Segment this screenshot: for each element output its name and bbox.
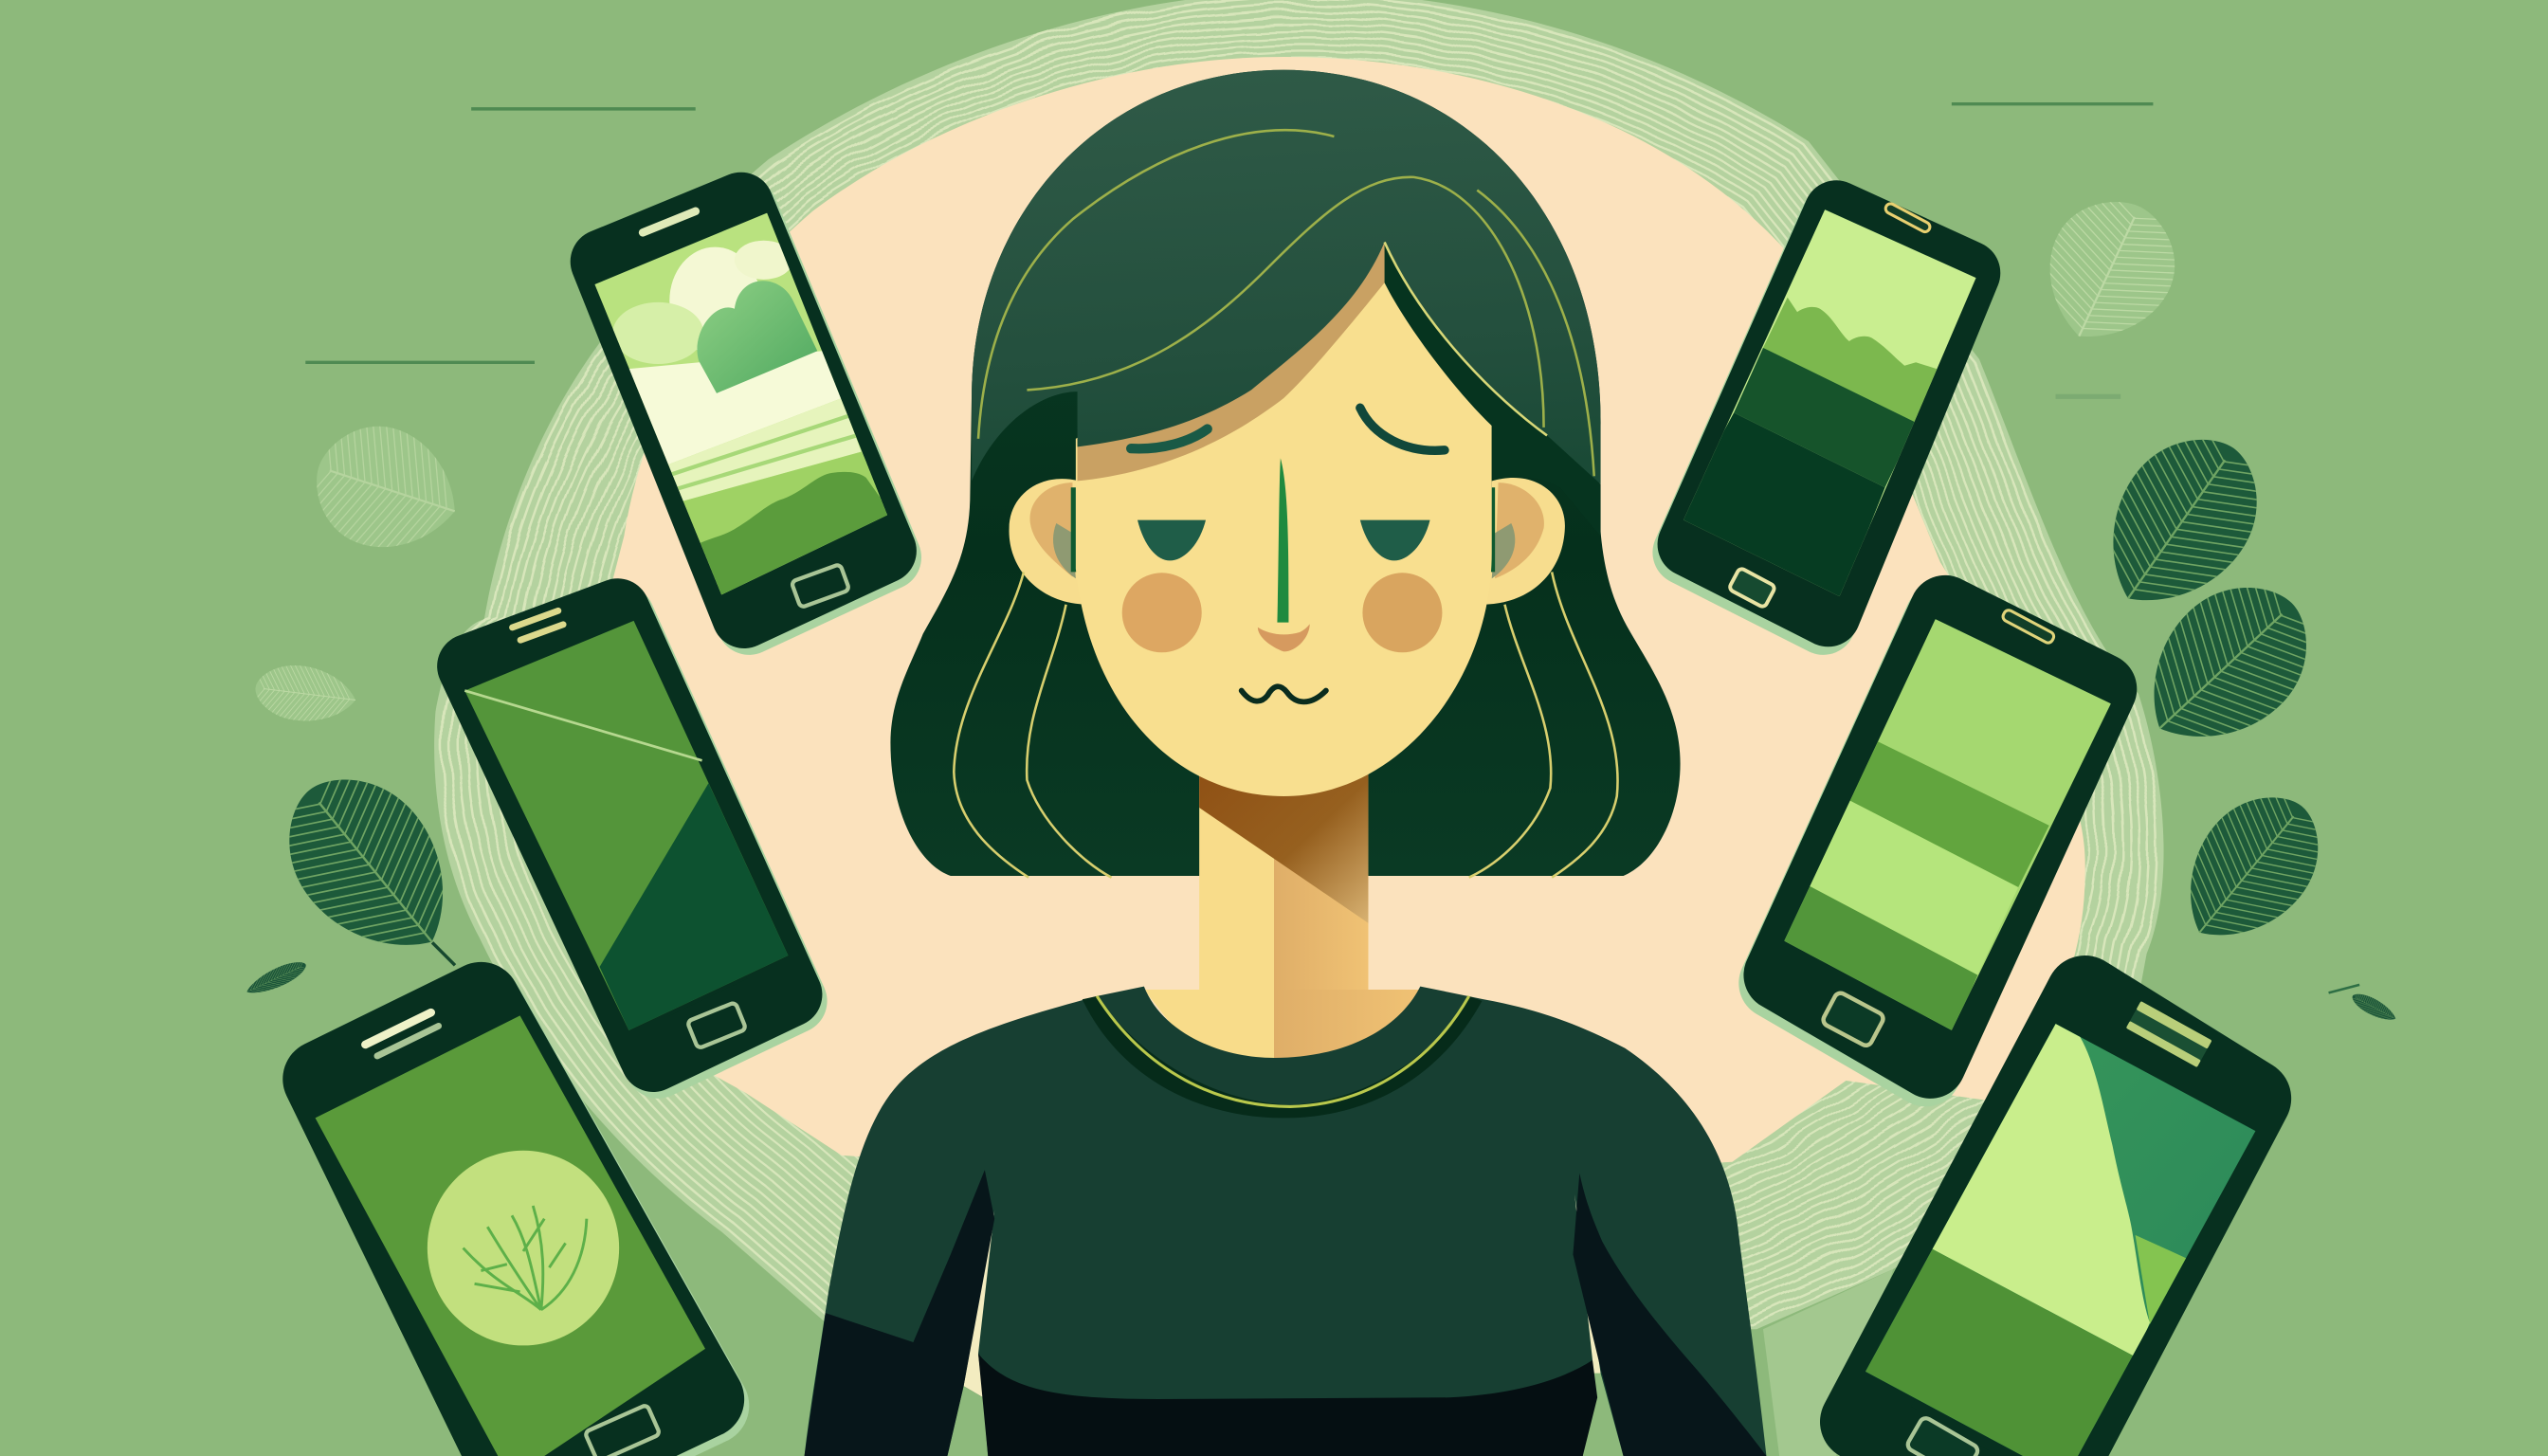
tree circle <box>428 1151 619 1345</box>
ear: left <box>1010 479 1097 605</box>
hair: right dark parting <box>1385 242 1601 537</box>
gap: right arm <box>1574 1194 1624 1456</box>
faint leaf: small left <box>241 656 359 731</box>
parting highlight <box>1385 242 1547 435</box>
phone 2: middle left <box>464 607 794 1066</box>
hair strands <box>978 130 1594 476</box>
halo: textured ring <box>434 0 2164 1333</box>
faint leaf: left <box>283 398 476 575</box>
home button <box>1821 991 1885 1047</box>
pale wash below ring <box>1763 1269 1893 1456</box>
home button <box>1905 1416 1980 1456</box>
tiny dark leaf: left <box>243 953 317 1001</box>
body: lower band <box>978 1354 1597 1456</box>
collar <box>1083 996 1482 1118</box>
cheek: right <box>1362 573 1442 652</box>
lower hair strands <box>954 572 1618 878</box>
screen: green split <box>464 621 788 1030</box>
body: right sleeve <box>1573 1174 1766 1456</box>
stem: left leaf <box>432 942 455 965</box>
eyebrow: left <box>1131 429 1208 448</box>
screen: landscape with clouds <box>595 212 887 595</box>
halo: cream disc <box>553 57 2085 1186</box>
eye: right <box>1360 520 1430 560</box>
speaker <box>1884 202 1932 233</box>
dark leaf: right top <box>2068 390 2305 641</box>
body: left sleeve <box>805 1170 994 1456</box>
screen: hillside <box>1866 1024 2255 1456</box>
phone 6: bottom right <box>1852 994 2255 1456</box>
phone 4: top right <box>1658 195 1999 623</box>
home button <box>687 1002 746 1048</box>
phone 1: top left <box>553 195 926 623</box>
forehead shadow <box>1078 242 1385 481</box>
speaker <box>638 206 701 238</box>
screen: green with tree circle <box>316 1015 705 1456</box>
nose tip <box>1258 624 1310 651</box>
home button <box>1728 568 1775 608</box>
neck opening <box>1144 990 1420 1065</box>
neck <box>1199 764 1368 999</box>
hair: back and lower <box>890 70 1681 876</box>
face <box>1076 244 1492 796</box>
gap: left arm <box>947 1210 994 1456</box>
tiny dark leaf: right <box>2344 986 2400 1027</box>
decorative lines <box>305 104 2153 396</box>
woman <box>805 70 1766 1456</box>
screen: striped bands <box>1784 619 2111 1030</box>
mouth <box>1242 686 1326 701</box>
hair: crown and fringe <box>972 70 1601 484</box>
home button <box>585 1405 660 1456</box>
home button <box>792 564 849 608</box>
cheek: left <box>1122 573 1202 652</box>
faint leaf: upper right <box>2016 163 2209 366</box>
eyebrow: right <box>1360 408 1445 450</box>
tiny stem: right <box>2329 985 2359 992</box>
screen: dark landscape <box>1684 209 1975 596</box>
dark leaf: right middle <box>2110 537 2357 782</box>
speaker <box>508 607 568 646</box>
ear: right <box>1482 478 1565 605</box>
dark leaf: right bottom <box>2151 754 2361 972</box>
speaker <box>360 1007 443 1064</box>
body: sweater <box>805 987 1766 1456</box>
phone 3: bottom left <box>316 1001 710 1456</box>
dark leaf: left <box>237 726 490 990</box>
speaker <box>2126 1001 2212 1067</box>
nose line <box>1277 458 1288 623</box>
speaker <box>2001 609 2055 645</box>
eye: left <box>1138 520 1206 560</box>
phone 5: middle right <box>1755 601 2129 1071</box>
